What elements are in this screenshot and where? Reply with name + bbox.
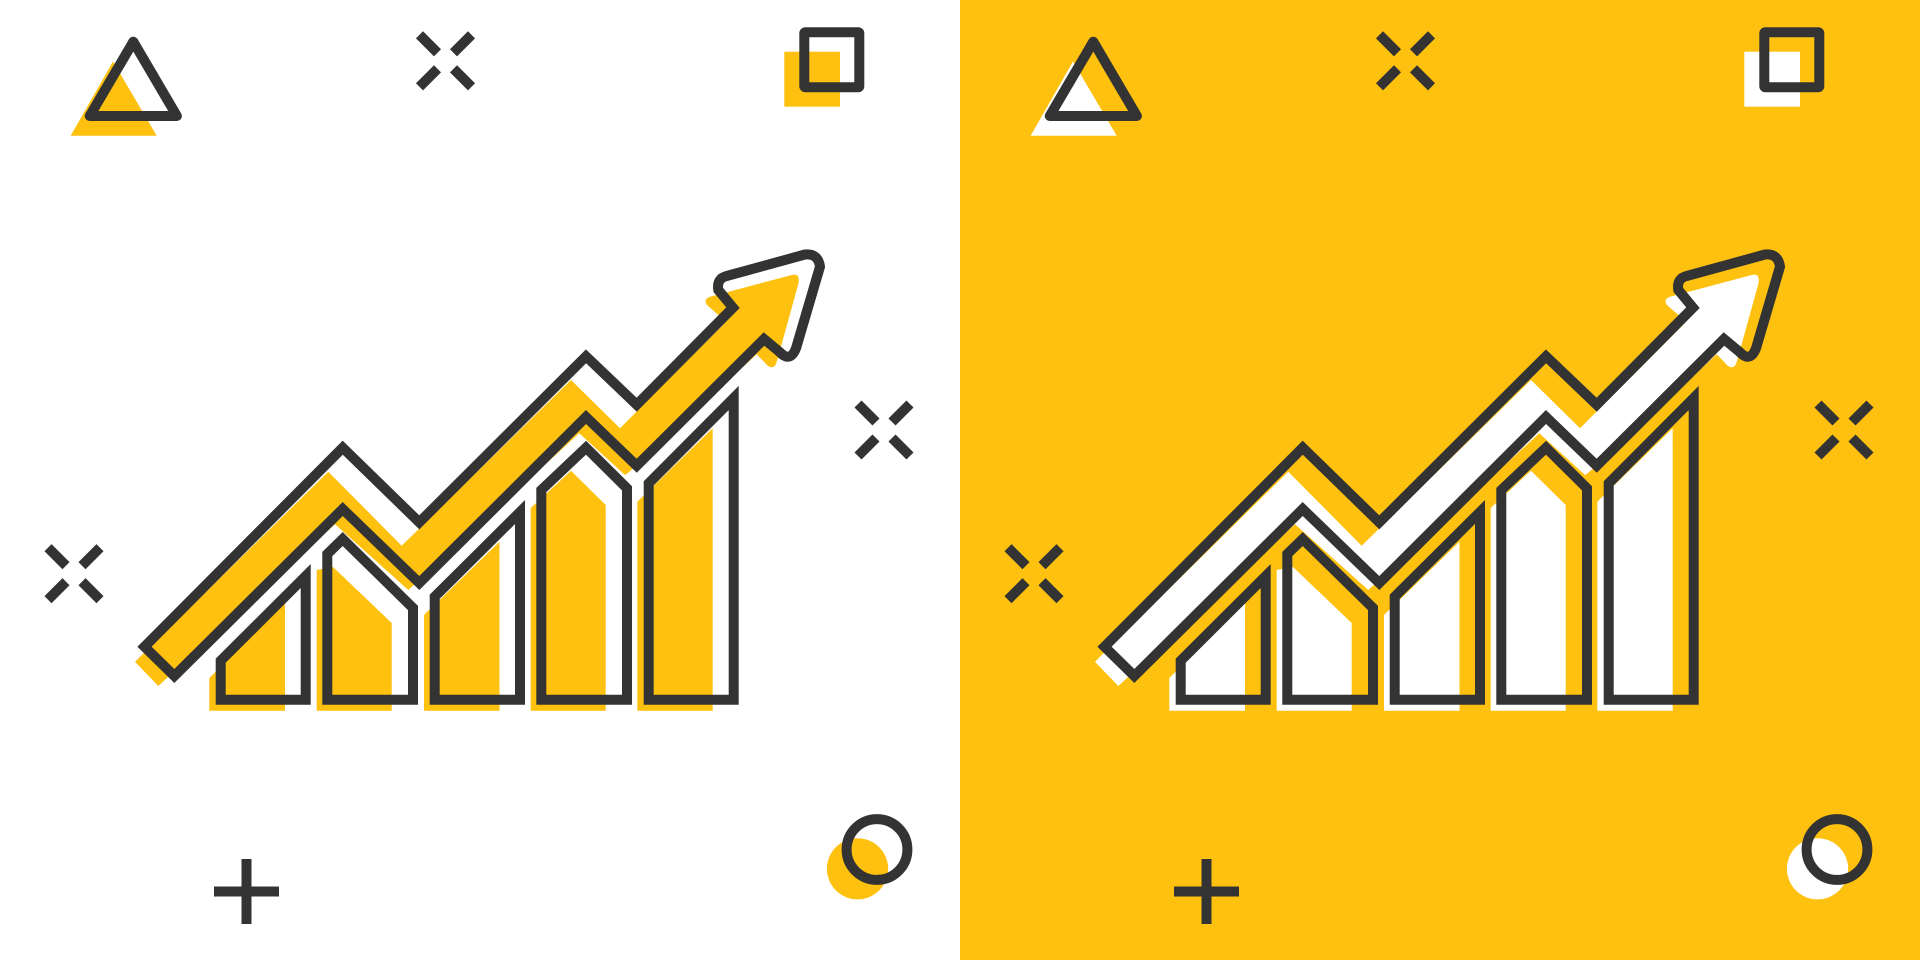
- bar 3: [1384, 512, 1480, 711]
- icon: square: [1744, 32, 1819, 107]
- panel: left icon set: [48, 32, 910, 924]
- panel: right icon set: [1008, 32, 1870, 924]
- icon: sparkle cross top: [420, 35, 472, 87]
- icon: triangle: [71, 42, 177, 136]
- arrow outline: [1104, 254, 1780, 676]
- icon: sparkle cross right: [1818, 404, 1870, 456]
- panel: yellow background: [960, 0, 1920, 960]
- bar 1: [1169, 576, 1266, 711]
- growth arrow: [135, 254, 820, 686]
- icon: circle: [827, 819, 907, 899]
- icon: sparkle cross top: [1380, 35, 1432, 87]
- bar 4: [531, 448, 627, 711]
- arrow yellow fill: [135, 275, 799, 686]
- icon: plus: [214, 859, 279, 924]
- arrow white fill: [1095, 275, 1759, 686]
- bar 2: [1277, 539, 1373, 711]
- icon: square: [784, 32, 859, 107]
- bar 1: [209, 576, 306, 711]
- arrow outline: [144, 254, 820, 676]
- bar chart: [1169, 398, 1694, 711]
- growth arrow: [1095, 254, 1780, 686]
- bar 2: [317, 539, 413, 711]
- icon: sparkle cross right: [858, 404, 910, 456]
- bar 3: [424, 512, 520, 711]
- icon: plus: [1174, 859, 1239, 924]
- icon: circle: [1787, 819, 1867, 899]
- bar 5: [637, 398, 734, 711]
- icon: sparkle cross left: [48, 548, 100, 600]
- bar 5: [1597, 398, 1694, 711]
- bar 4: [1491, 448, 1587, 711]
- icon: sparkle cross left: [1008, 548, 1060, 600]
- bar chart: [209, 398, 734, 711]
- panel: white background: [0, 0, 960, 960]
- icon: triangle: [1031, 42, 1137, 136]
